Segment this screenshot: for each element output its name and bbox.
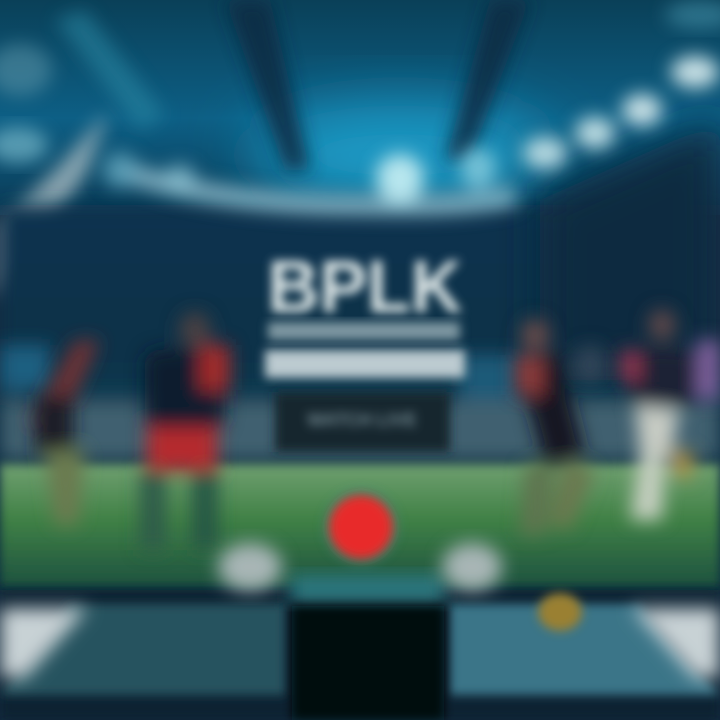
red play button — [323, 489, 399, 565]
dark caption box: WATCH LIVE — [307, 410, 417, 430]
middle stand background — [0, 120, 720, 405]
bottom console — [0, 575, 720, 720]
dark caption box — [275, 392, 450, 452]
stadium roof — [0, 0, 720, 300]
crowd band — [0, 345, 720, 460]
soccer ball right — [442, 543, 502, 591]
title text block — [265, 245, 465, 378]
soccer ball left — [218, 543, 282, 591]
player: far left — [30, 340, 100, 525]
pitch — [0, 464, 720, 589]
player: centre right — [515, 319, 608, 535]
title text block: BPLK — [268, 245, 462, 328]
player: far right — [620, 309, 720, 520]
player: centre left — [140, 312, 230, 550]
floodlight arc — [102, 56, 719, 206]
yellow ball — [538, 593, 582, 631]
